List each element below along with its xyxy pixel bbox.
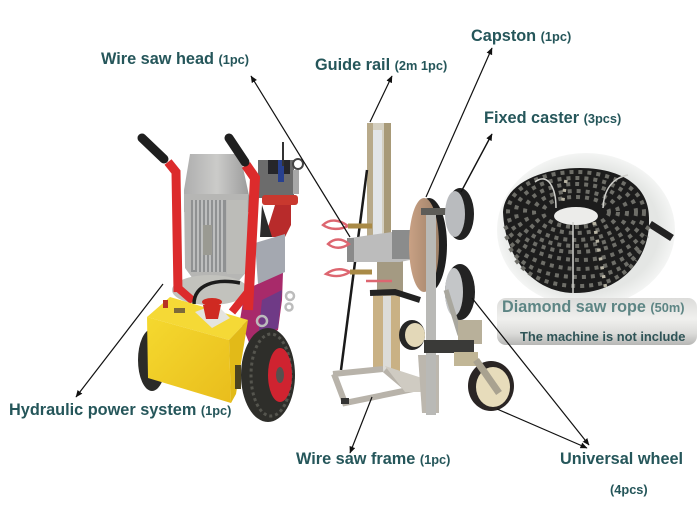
right handle grip <box>229 138 245 162</box>
right red handle <box>246 165 255 310</box>
hydraulic hose fittings <box>323 221 392 281</box>
bottom wheel <box>468 360 514 411</box>
head bracket <box>377 260 403 296</box>
arrow: guide rail <box>370 76 392 122</box>
frame post <box>418 355 439 413</box>
axle <box>421 208 454 215</box>
front wheel <box>241 328 295 422</box>
light bead highlights <box>562 180 606 290</box>
label: guide rail: Guide rail (2m 1pc) <box>315 56 447 74</box>
binding ties <box>535 175 628 293</box>
rope tail <box>650 224 672 238</box>
motor <box>184 154 250 283</box>
label: capston: Capston (1pc) <box>471 27 571 45</box>
upper fixed caster <box>445 188 474 240</box>
frame base <box>333 366 422 404</box>
red cross bars <box>177 287 248 312</box>
label: wire saw frame: Wire saw frame (1pc) <box>296 450 450 468</box>
rear small wheel <box>399 320 425 350</box>
label: fixed caster: Fixed caster (3pcs) <box>484 109 621 127</box>
panel: diamond rope caption <box>497 298 697 345</box>
motor base <box>172 275 248 305</box>
clamp handle <box>370 292 420 300</box>
label: universal wheel quantity: (4pcs) <box>610 482 648 497</box>
arrow: universal wheel lower <box>497 409 587 448</box>
rope line <box>341 170 367 370</box>
arrow: fixed caster <box>461 134 492 192</box>
arrow: wire saw head <box>251 76 350 237</box>
hydraulic valves <box>258 142 303 237</box>
label: universal wheel: Universal wheel <box>560 450 683 468</box>
arrow: wire saw frame <box>350 397 372 453</box>
halo <box>497 153 675 307</box>
hydraulic power system machine <box>138 138 303 422</box>
wire saw machine <box>323 123 514 415</box>
aluminum tank box <box>255 234 285 284</box>
yellow control box <box>147 297 248 403</box>
eye bolts <box>257 292 294 326</box>
head motor <box>347 230 420 262</box>
guide rail <box>367 123 400 372</box>
lower caster <box>445 264 482 344</box>
label: diamond saw rope: Diamond saw rope (50m) <box>502 298 685 316</box>
arrow: universal wheel upper <box>472 298 589 445</box>
arrow: hydraulic power system <box>76 284 163 397</box>
diamond saw rope coil <box>497 153 675 307</box>
bead rows <box>505 172 649 286</box>
cross bracket <box>424 340 478 366</box>
capstan disc <box>409 198 447 292</box>
note: not included: The machine is not include <box>520 329 685 344</box>
rear wheel <box>138 329 166 391</box>
label: wire saw head: Wire saw head (1pc) <box>101 50 249 68</box>
magenta pump body <box>240 272 283 345</box>
power cable <box>194 281 240 304</box>
vertical arm <box>426 210 436 415</box>
label: hydraulic power system: Hydraulic power system (1pc) <box>9 401 231 419</box>
left red handle <box>168 162 178 292</box>
coil body <box>503 168 649 293</box>
arrow: capston <box>426 48 492 197</box>
left handle grip <box>142 138 164 159</box>
coil hole <box>554 207 598 225</box>
